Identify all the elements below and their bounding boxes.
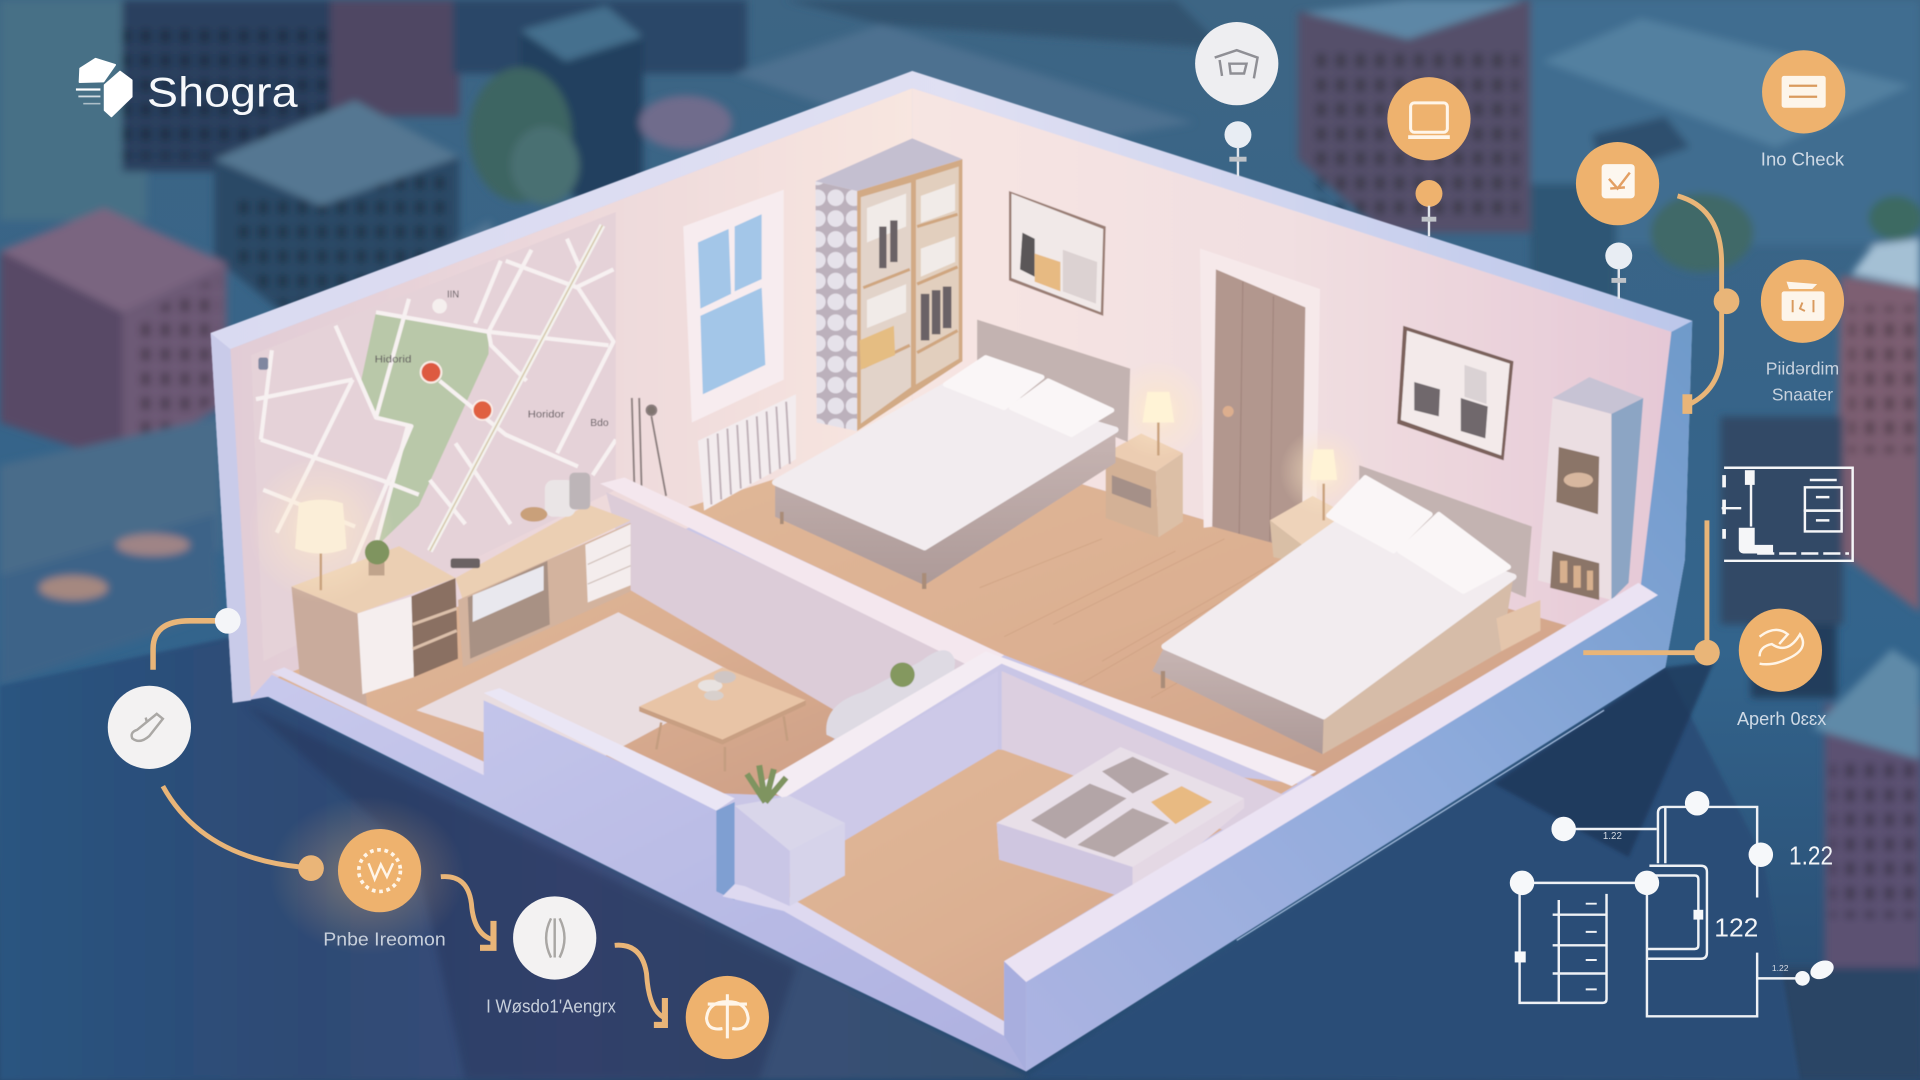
front curb rim — [722, 884, 1004, 1036]
floor boards — [980, 539, 1273, 698]
interior wall upper — [600, 478, 1004, 716]
schematic values: 1.22 — [1789, 842, 1833, 870]
connector curve to wall — [1678, 196, 1739, 414]
wall art one — [1009, 191, 1106, 316]
potted plant on sideboard — [365, 540, 389, 576]
wiring schematic: 122 — [1714, 915, 1758, 943]
logo wordmark: Shogra — [147, 69, 298, 116]
armchair and plant — [826, 650, 955, 749]
floor plan mini diagram — [1722, 468, 1853, 561]
logo mark — [76, 59, 132, 116]
nightstand two — [1270, 496, 1347, 563]
arrow to white node — [441, 877, 496, 948]
icon: orange compass node — [686, 976, 769, 1059]
isometric apartment model — [211, 71, 1692, 1071]
map labels: Horidor — [528, 410, 565, 421]
back left wall with map — [211, 88, 912, 703]
label: aperh: Aperh 0ɛɛx — [1737, 708, 1826, 729]
wiring schematic: 1.22 — [1603, 831, 1622, 842]
bed one — [775, 320, 1130, 589]
glow behind orange node — [269, 796, 465, 955]
room base — [211, 71, 1692, 1071]
wiring schematic: 1.22 — [1772, 963, 1789, 973]
logo — [76, 59, 298, 116]
kettle and jars — [451, 473, 590, 568]
bedroom floor — [688, 435, 1647, 778]
map labels: IIN — [447, 290, 459, 301]
wiring schematic — [1510, 791, 1837, 1016]
curve to orange node — [163, 786, 324, 881]
back right wall — [912, 88, 1671, 649]
icon: checklist node — [1576, 142, 1659, 299]
label: pnbe ireomon: Pnbe Ireomon — [323, 928, 446, 949]
left connector and white node — [153, 608, 241, 670]
closet room floor — [784, 749, 1298, 1029]
label: info check: Ino Check — [1761, 148, 1845, 169]
window — [683, 190, 784, 422]
icon: top orange screen node — [1387, 77, 1471, 236]
map pins — [421, 362, 492, 420]
sideboard — [291, 504, 631, 708]
icon: aperh node — [1739, 609, 1822, 692]
small side table — [1496, 600, 1540, 651]
door — [1200, 249, 1320, 551]
tall side cabinet — [1538, 377, 1643, 600]
icon: top white node — [1195, 22, 1278, 176]
wall top rim — [211, 71, 1692, 349]
living room floor — [272, 539, 882, 796]
label: window angle: I Wøsdo1'Aengrx — [486, 996, 616, 1017]
icon: suitcase card — [1761, 260, 1844, 343]
door knob — [1223, 406, 1234, 417]
map labels: Hidorid — [375, 354, 411, 365]
wall map — [255, 214, 616, 564]
label: pilderdim snaater: Piidərdim — [1766, 359, 1839, 379]
label: pilderdim snaater — [1766, 359, 1839, 404]
label: pilderdim snaater: Snaater — [1772, 384, 1833, 404]
icon: info check card — [1762, 50, 1845, 133]
wall art two — [1397, 326, 1513, 460]
bed two — [1152, 465, 1532, 754]
icon: orange badge node — [338, 829, 421, 912]
icon: white tool node — [108, 686, 191, 769]
radiator — [698, 394, 796, 511]
front right wall — [1004, 321, 1692, 1071]
map labels: Bdo — [590, 418, 609, 429]
bedside lamp one — [1109, 361, 1207, 459]
storage box — [997, 747, 1244, 900]
nightstand one — [1106, 433, 1183, 538]
arrow to orange node — [615, 945, 667, 1025]
partition wall to closet — [759, 651, 1316, 877]
map labels — [375, 290, 609, 429]
table lamp — [247, 456, 394, 602]
rug — [416, 612, 747, 765]
front outer wall — [251, 675, 1026, 1071]
orange connector with node — [1583, 520, 1720, 666]
planter box — [735, 765, 845, 906]
coffee table — [639, 667, 806, 771]
inner corner wedge — [1004, 961, 1026, 1071]
icon: white width node — [513, 896, 596, 980]
tall bookshelf — [816, 138, 962, 431]
coat stand — [632, 398, 666, 496]
bedside lamp two — [1280, 427, 1368, 520]
